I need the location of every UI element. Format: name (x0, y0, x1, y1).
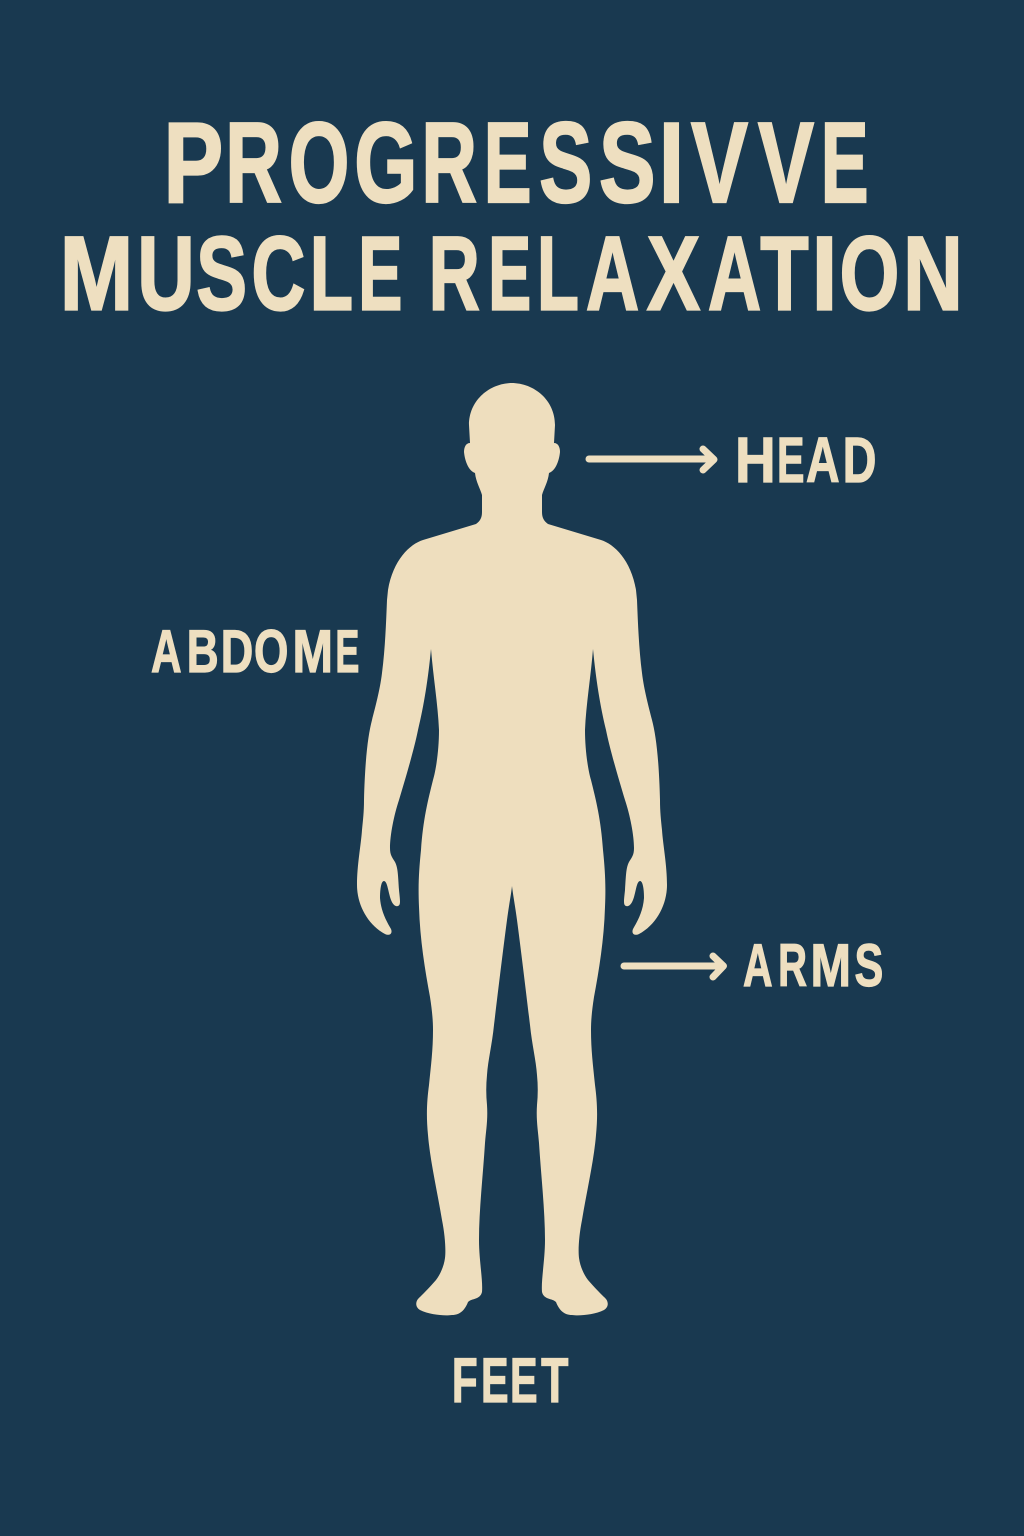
label: abdomen: D (221, 618, 253, 685)
label: head: D (843, 424, 876, 496)
label: abdomen: B (187, 618, 219, 685)
title: S (599, 100, 656, 227)
title: V (758, 100, 814, 227)
title: R (421, 100, 477, 227)
title: N (903, 216, 963, 333)
title: E (821, 100, 869, 227)
title: S (196, 216, 247, 333)
label: abdomen: E (335, 618, 359, 685)
arrow: head (589, 449, 714, 470)
title: L (310, 216, 353, 333)
label: arms: A (743, 932, 773, 999)
title: A (708, 216, 761, 333)
title: S (539, 100, 592, 227)
title: I (812, 216, 837, 333)
title: L (537, 216, 579, 333)
label: abdomen: O (254, 618, 288, 685)
title: R (225, 100, 282, 227)
label: feet: T (541, 1346, 568, 1416)
title: O (289, 100, 349, 227)
title: A (586, 216, 639, 333)
title: U (137, 216, 195, 333)
label: feet: E (510, 1346, 538, 1416)
label: head: E (777, 424, 804, 496)
label: feet: E (481, 1346, 509, 1416)
label: abdomen: M (292, 618, 333, 685)
title (60, 100, 963, 333)
title: M (60, 216, 133, 333)
title: C (252, 216, 305, 333)
arrow: arms (624, 956, 724, 977)
title: X (647, 216, 700, 333)
title: R (429, 216, 480, 333)
body silhouette (357, 383, 667, 1315)
title: T (760, 216, 809, 333)
label: head: H (735, 424, 776, 496)
label: arms: S (854, 932, 883, 999)
title: E (488, 216, 531, 333)
title: E (484, 100, 532, 227)
title: V (691, 100, 748, 227)
title: E (358, 216, 402, 333)
label: abdomen: A (151, 618, 182, 685)
label: arms: M (810, 932, 851, 999)
title: P (164, 100, 223, 227)
title: O (840, 216, 899, 333)
label: head: A (806, 424, 840, 496)
label: arms: R (778, 932, 807, 999)
title: G (354, 100, 417, 227)
label: feet: F (452, 1346, 478, 1416)
title: I (659, 100, 684, 227)
